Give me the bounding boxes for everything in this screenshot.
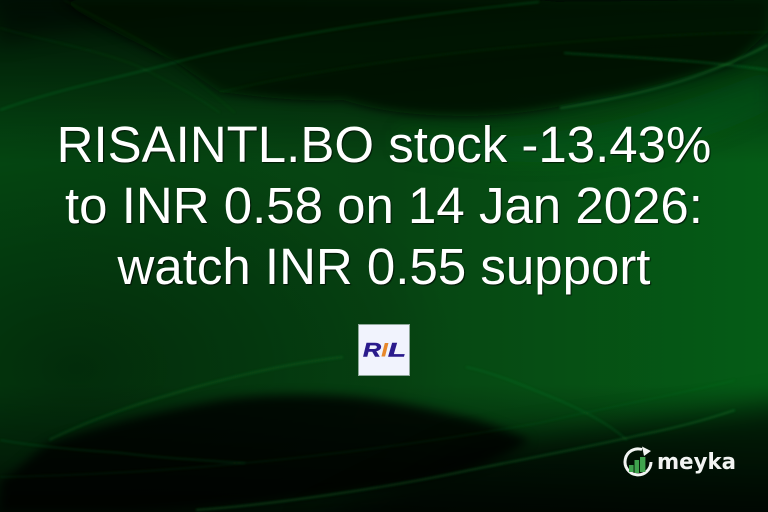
company logo: RIL bbox=[358, 324, 410, 376]
wordmark: meyka bbox=[657, 450, 736, 475]
company logo: RIL: L bbox=[388, 340, 406, 362]
company logo: RIL: R bbox=[363, 340, 381, 362]
title: to INR 0.58 on 14 Jan 2026: bbox=[65, 177, 703, 234]
title: watch INR 0.55 support bbox=[118, 238, 650, 295]
icon: chart in ring bbox=[625, 446, 651, 475]
title bbox=[57, 116, 711, 296]
brand: meyka logo bbox=[624, 446, 736, 476]
company logo: RIL: I bbox=[381, 340, 389, 362]
title: RISAINTL.BO stock -13.43% bbox=[57, 116, 711, 173]
